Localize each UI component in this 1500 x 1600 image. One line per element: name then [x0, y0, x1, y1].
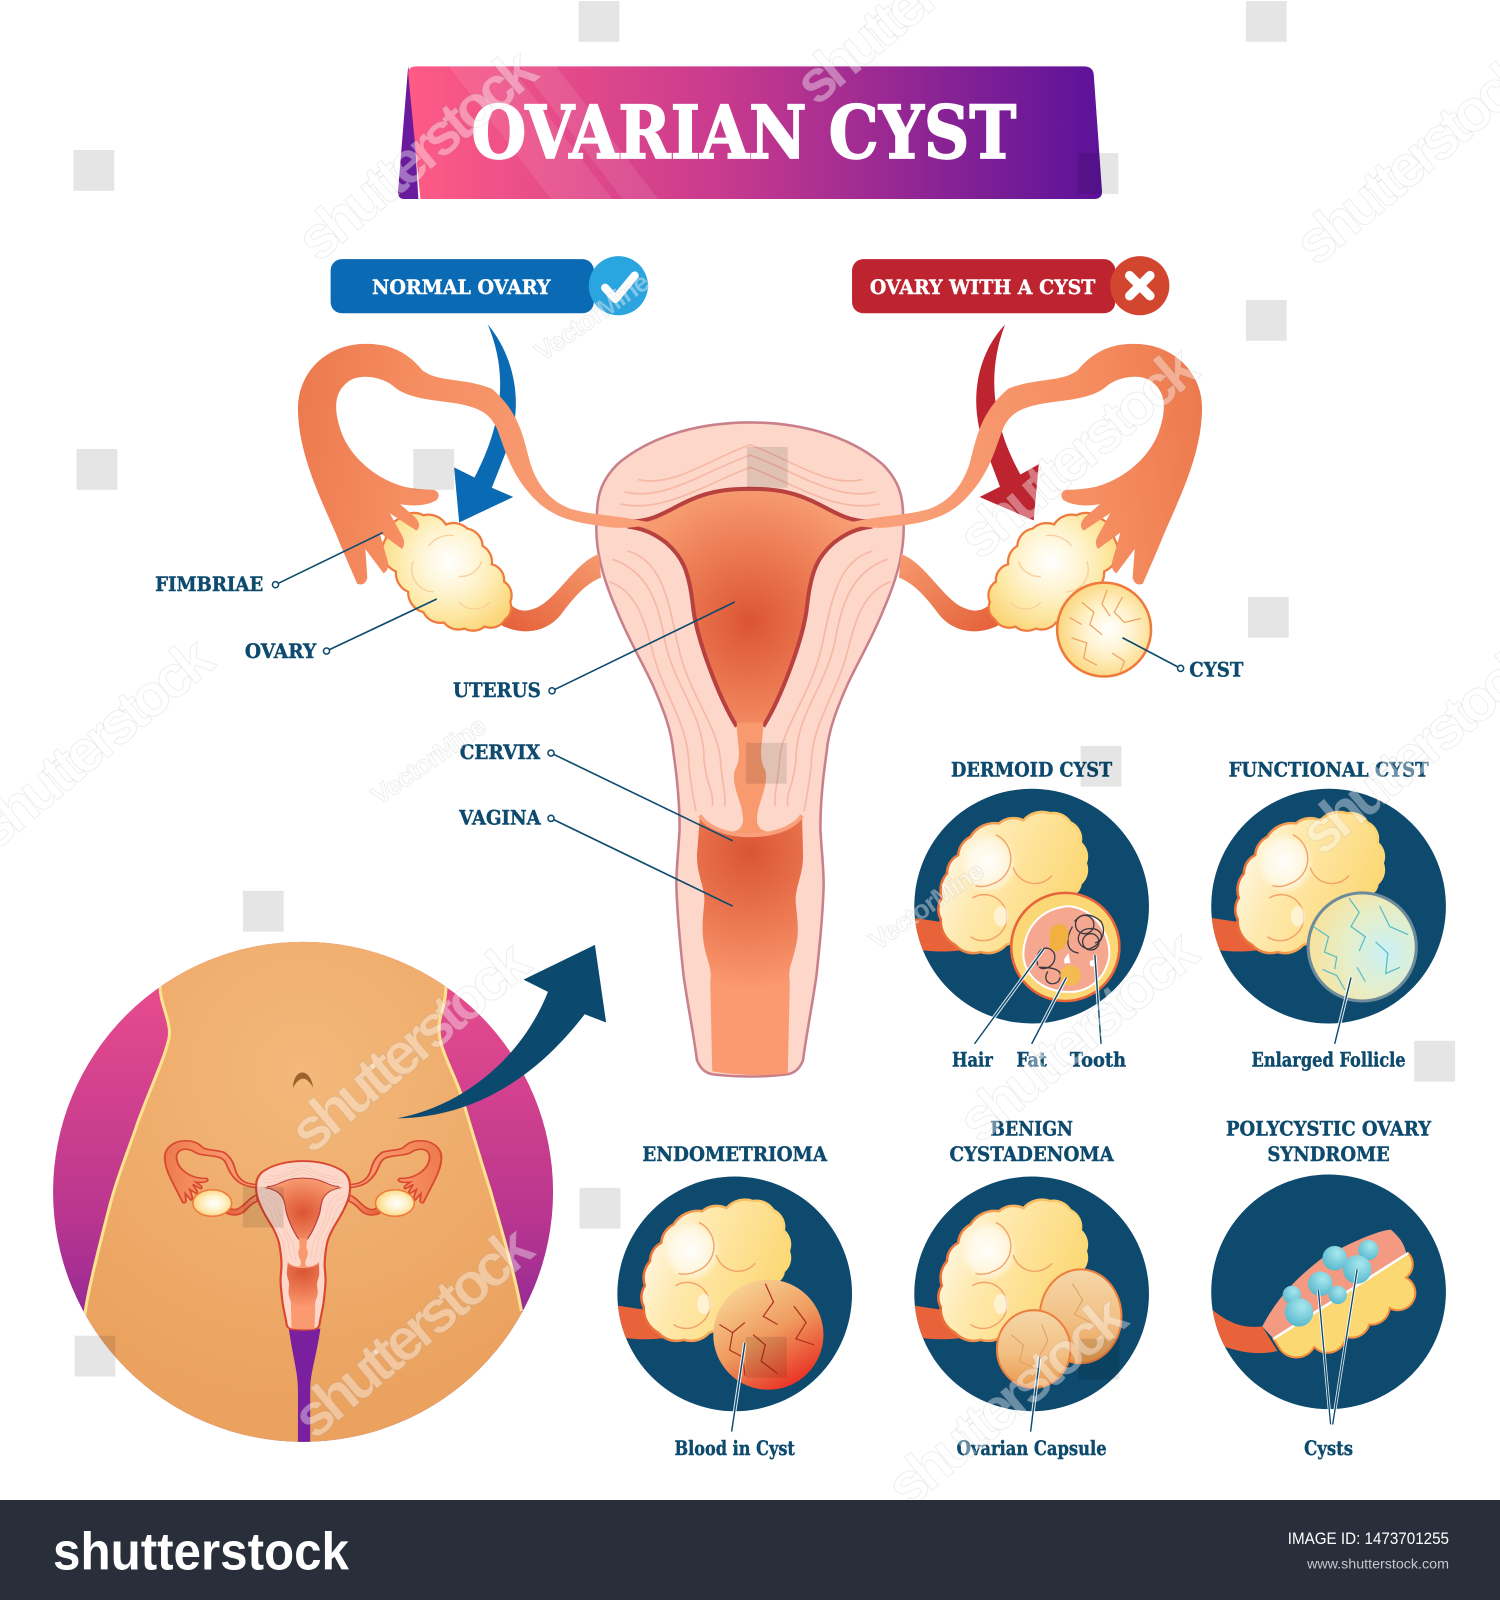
caption: hair fat tooth: [952, 1048, 1126, 1071]
label: cervix: CERVIX: [460, 741, 541, 764]
right ligament, ovary and tube: [847, 344, 1202, 631]
title banner: [398, 66, 1102, 199]
heading: benign cystadenoma: BENIGN: [990, 1118, 1073, 1141]
leader: blood in cyst: [732, 1343, 745, 1432]
heading: polycystic ovary syndrome: [1226, 1118, 1432, 1166]
stock watermarks: shutterstock: [277, 927, 542, 1165]
heading: benign cystadenoma: [949, 1118, 1115, 1166]
label: cyst: [1122, 638, 1244, 682]
badge: ovary with a cyst: OVARY WITH A CYST: [870, 276, 1096, 299]
label: ovary: [245, 599, 437, 663]
badge: normal ovary: NORMAL OVARY: [372, 276, 552, 299]
badge: ovary with a cyst: [852, 256, 1169, 315]
badge: normal ovary: [331, 256, 648, 315]
stock watermarks: shutterstock: [945, 333, 1211, 571]
panel: dermoid cyst: [904, 789, 1149, 1044]
stock watermarks: shutterstock: [873, 1282, 1139, 1520]
uterus illustration: [596, 422, 904, 1077]
leader: ovarian capsule: [1031, 1357, 1040, 1432]
heading: polycystic ovary syndrome: POLYCYSTIC OVARY: [1226, 1118, 1432, 1141]
arrow: abdomen to uterus: [397, 945, 606, 1118]
caption: blood in cyst: Blood in Cyst: [674, 1437, 795, 1460]
stock watermarks: VectorMine: [366, 710, 492, 811]
leaders: hair fat tooth: [974, 949, 1101, 1044]
label: vagina: VAGINA: [458, 806, 542, 829]
arrow: red to ovary with cyst: [976, 324, 1039, 520]
heading: endometrioma: ENDOMETRIOMA: [642, 1143, 828, 1166]
caption: hair fat tooth: Fat: [1016, 1048, 1047, 1071]
footer bar: www.shutterstock.com: [1306, 1556, 1449, 1572]
arrow: blue to normal ovary: [454, 324, 516, 522]
panel: abdomen with reproductive system: [53, 918, 553, 1449]
label: fimbriae: FIMBRIAE: [155, 573, 263, 596]
label: uterus: UTERUS: [453, 679, 541, 702]
cyst on right ovary: [1057, 583, 1151, 677]
stock watermarks: VectorMine: [864, 855, 990, 956]
left ligament, ovary and tube: [298, 344, 653, 631]
footer bar: [0, 1500, 1500, 1600]
heading: polycystic ovary syndrome: SYNDROME: [1267, 1143, 1390, 1166]
stock watermarks: shutterstock: [945, 917, 1211, 1155]
panel: endometrioma: [607, 1177, 852, 1432]
panel: polycystic ovary syndrome: [1206, 1174, 1446, 1424]
stock watermarks: shutterstock: [280, 1212, 545, 1451]
caption: enlarged follicle: Enlarged Follicle: [1252, 1048, 1406, 1071]
title text: OVARIAN CYST: [471, 90, 1016, 176]
caption: hair fat tooth: Tooth: [1070, 1048, 1126, 1071]
label: cervix: [460, 741, 733, 841]
leader: enlarged follicle: [1335, 978, 1351, 1044]
heading: dermoid cyst: DERMOID CYST: [951, 759, 1113, 782]
footer bar: IMAGE ID: 1473701255: [1288, 1530, 1449, 1548]
leader: cysts: [1318, 1269, 1357, 1424]
label: uterus: [453, 602, 735, 702]
stock watermarks: VectorMine: [529, 266, 655, 367]
panel: benign cystadenoma: [904, 1177, 1149, 1432]
mini reproductive system: [165, 1141, 441, 1330]
label: ovary: OVARY: [245, 640, 317, 663]
label: cyst: CYST: [1189, 659, 1244, 682]
label: vagina: [458, 806, 733, 906]
panel: functional cyst: [1201, 789, 1446, 1044]
label: fimbriae: [155, 533, 383, 596]
stock watermarks: shutterstock: [284, 35, 550, 273]
caption: ovarian capsule: Ovarian Capsule: [957, 1437, 1107, 1460]
heading: benign cystadenoma: CYSTADENOMA: [949, 1143, 1115, 1166]
caption: cysts: Cysts: [1304, 1437, 1353, 1460]
footer logo: shutterstock: [53, 1522, 349, 1581]
heading: functional cyst: FUNCTIONAL CYST: [1229, 759, 1429, 782]
caption: hair fat tooth: Hair: [952, 1048, 994, 1071]
